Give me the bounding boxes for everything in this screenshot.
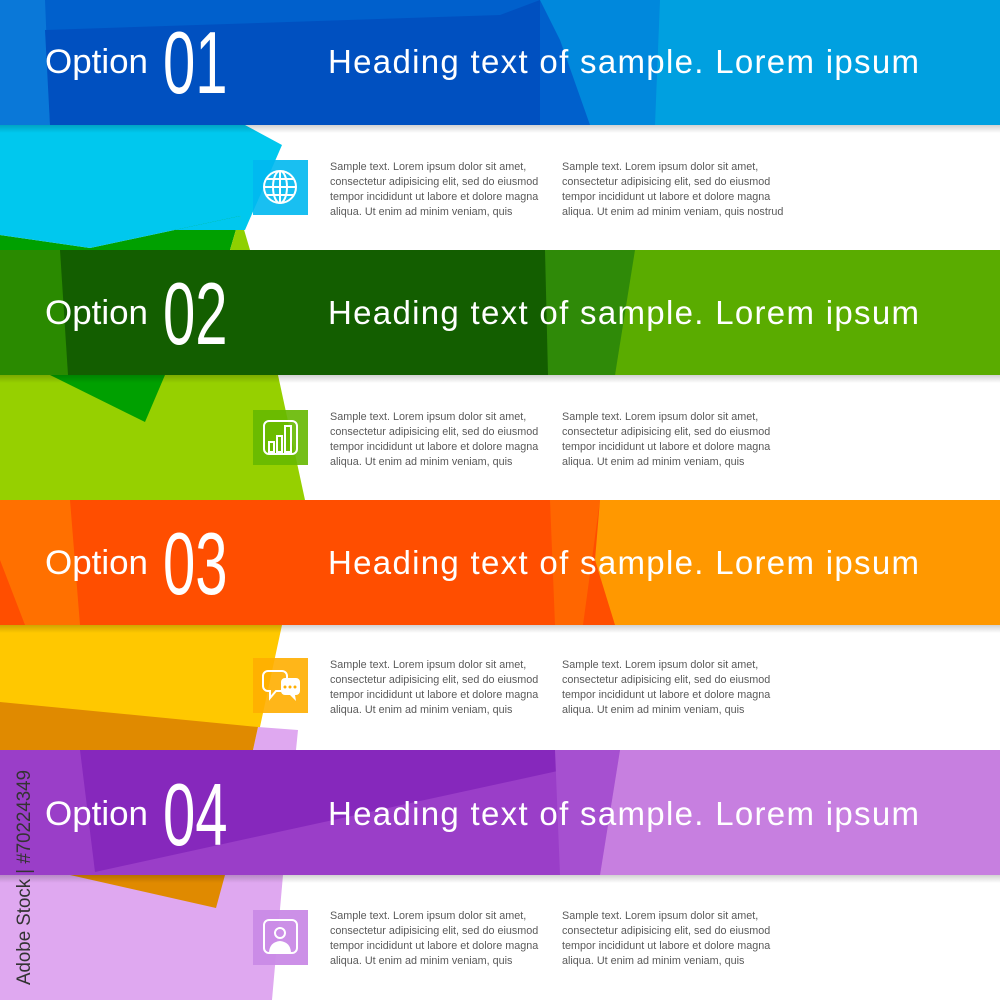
section 3 body shapes xyxy=(0,625,298,750)
body text section 2: aliqua. Ut enim ad minim veniam, quis xyxy=(330,456,513,468)
body text section 4: aliqua. Ut enim ad minim veniam, quis xyxy=(330,955,513,967)
icon: globe xyxy=(253,160,308,215)
body text section 2: consectetur adipisicing elit, sed do eiusmod xyxy=(330,426,538,438)
body text section 3: tempor incididunt ut labore et dolore magna xyxy=(562,689,770,701)
body text section 4: Sample text. Lorem ipsum dolor sit amet, xyxy=(330,910,526,922)
body text section 3: Sample text. Lorem ipsum dolor sit amet, xyxy=(330,659,526,671)
body text section 4: consectetur adipisicing elit, sed do eiusmod xyxy=(562,925,770,937)
body text section 1: aliqua. Ut enim ad minim veniam, quis xyxy=(330,206,513,218)
header band 1 xyxy=(0,0,1000,133)
heading row 3: 03 xyxy=(163,515,228,613)
body text section 1: consectetur adipisicing elit, sed do eiusmod xyxy=(562,176,770,188)
heading row 2 xyxy=(45,265,919,363)
body text section 4: tempor incididunt ut labore et dolore magna xyxy=(330,940,538,952)
heading row 4: Heading text of sample. Lorem ipsum xyxy=(328,795,919,832)
body text section 2: aliqua. Ut enim ad minim veniam, quis xyxy=(562,456,745,468)
body text section 1 xyxy=(330,161,783,218)
body text section 1: tempor incididunt ut labore et dolore magna xyxy=(562,191,770,203)
body text section 1: tempor incididunt ut labore et dolore magna xyxy=(330,191,538,203)
body text section 4: aliqua. Ut enim ad minim veniam, quis xyxy=(562,955,745,967)
heading row 2: Option xyxy=(45,294,148,332)
heading row 2: Heading text of sample. Lorem ipsum xyxy=(328,294,919,331)
body text section 2: tempor incididunt ut labore et dolore magna xyxy=(562,441,770,453)
header band 2 xyxy=(0,250,1000,383)
body text section 4: tempor incididunt ut labore et dolore magna xyxy=(562,940,770,952)
icon: person xyxy=(253,910,308,965)
heading row 1: Option xyxy=(45,43,148,81)
heading row 4: Option xyxy=(45,795,148,833)
body text section 4: consectetur adipisicing elit, sed do eiusmod xyxy=(330,925,538,937)
section 4 body shapes xyxy=(0,875,283,1000)
heading row 2: 02 xyxy=(163,265,228,363)
body text section 3 xyxy=(330,659,770,716)
body text section 2: tempor incididunt ut labore et dolore magna xyxy=(330,441,538,453)
body text section 3: aliqua. Ut enim ad minim veniam, quis xyxy=(562,704,745,716)
body text section 3: Sample text. Lorem ipsum dolor sit amet, xyxy=(562,659,758,671)
body text section 1: Sample text. Lorem ipsum dolor sit amet, xyxy=(330,161,526,173)
heading row 4: 04 xyxy=(163,766,228,864)
header band 3 xyxy=(0,500,1000,633)
body text section 4 xyxy=(330,910,770,967)
heading row 1: Heading text of sample. Lorem ipsum xyxy=(328,43,919,80)
body text section 3: consectetur adipisicing elit, sed do eiusmod xyxy=(330,674,538,686)
body text section 3: tempor incididunt ut labore et dolore magna xyxy=(330,689,538,701)
icon: bar chart xyxy=(253,410,308,465)
body text section 1: Sample text. Lorem ipsum dolor sit amet, xyxy=(562,161,758,173)
watermark: vertical stock id: Adobe Stock | #70224349 xyxy=(14,770,35,985)
body text section 1: consectetur adipisicing elit, sed do eiusmod xyxy=(330,176,538,188)
heading row 1: 01 xyxy=(163,14,228,112)
body text section 3: aliqua. Ut enim ad minim veniam, quis xyxy=(330,704,513,716)
heading row 3: Heading text of sample. Lorem ipsum xyxy=(328,544,919,581)
body text section 2: Sample text. Lorem ipsum dolor sit amet, xyxy=(562,411,758,423)
heading row 3 xyxy=(45,515,919,613)
section 2 body shapes xyxy=(0,375,305,500)
body text section 1: aliqua. Ut enim ad minim veniam, quis nostrud xyxy=(562,206,783,218)
body text section 2: consectetur adipisicing elit, sed do eiusmod xyxy=(562,426,770,438)
body text section 2: Sample text. Lorem ipsum dolor sit amet, xyxy=(330,411,526,423)
header band 4 xyxy=(0,750,1000,883)
heading row 1 xyxy=(45,14,919,112)
heading row 4 xyxy=(45,766,919,864)
heading row 3: Option xyxy=(45,544,148,582)
section 1 body shapes xyxy=(0,125,282,250)
body text section 2 xyxy=(330,411,770,468)
icon: chat bubbles xyxy=(253,658,308,713)
body text section 4: Sample text. Lorem ipsum dolor sit amet, xyxy=(562,910,758,922)
body text section 3: consectetur adipisicing elit, sed do eiusmod xyxy=(562,674,770,686)
